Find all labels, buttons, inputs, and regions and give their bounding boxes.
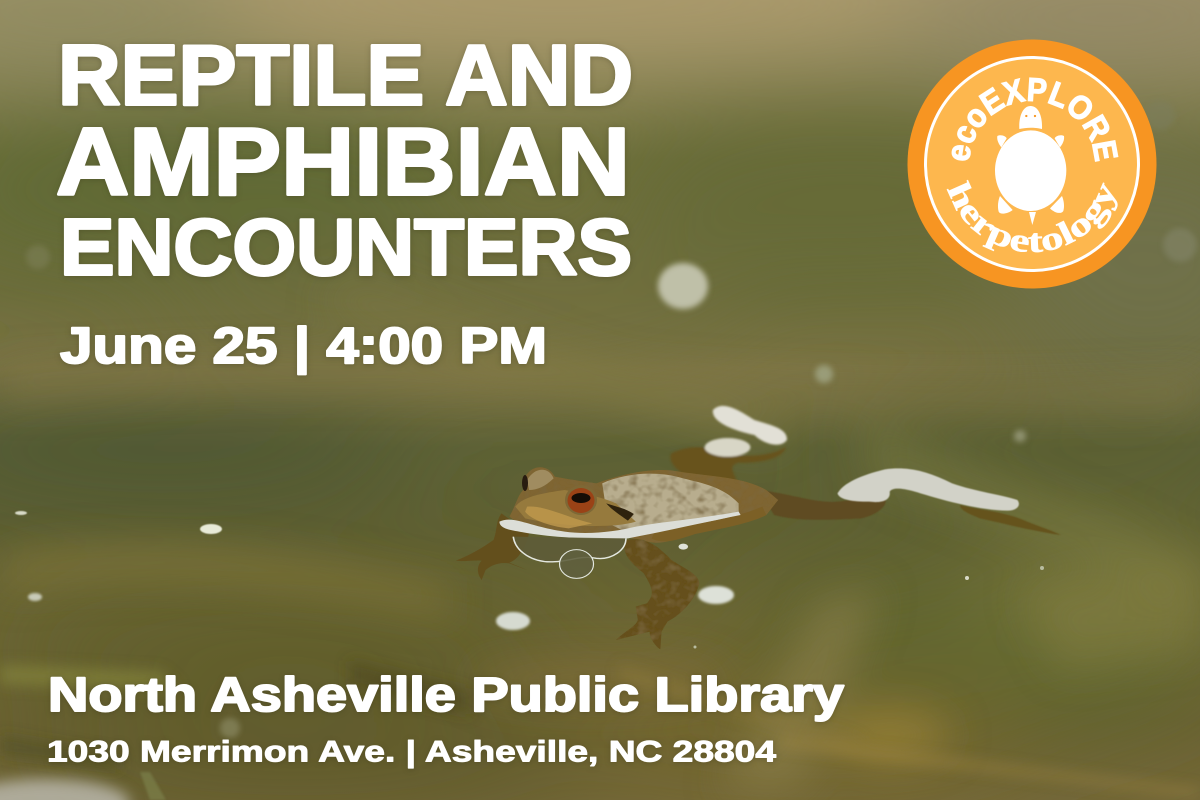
frog eye <box>522 475 597 515</box>
frog <box>456 406 1061 649</box>
venue name: North Asheville Public Library <box>48 669 844 722</box>
title: ENCOUNTERS <box>60 202 632 292</box>
badge text: ecoEXPLORE: ecoEXPLORE <box>952 77 1118 162</box>
small bubble <box>679 544 688 550</box>
left front leg <box>456 513 529 580</box>
water reflection under the head <box>513 537 626 578</box>
front leg <box>616 539 699 649</box>
rear leg raised <box>670 406 787 485</box>
title <box>56 28 633 292</box>
date and time: June 25 | 4:00 PM <box>60 317 547 375</box>
title: AMPHIBIAN <box>56 108 630 216</box>
rear foot <box>837 468 1019 511</box>
rear leg stretched <box>758 490 1061 535</box>
icon: turtle <box>995 106 1066 225</box>
badge: ecoEXPLORE herpetology <box>908 40 1156 288</box>
title: REPTILE AND <box>58 28 633 124</box>
badge text: herpetology: herpetology <box>946 180 1118 252</box>
body <box>499 467 778 543</box>
address: 1030 Merrimon Ave. | Asheville, NC 28804 <box>47 736 776 768</box>
out-of-focus bubbles <box>15 100 1197 738</box>
